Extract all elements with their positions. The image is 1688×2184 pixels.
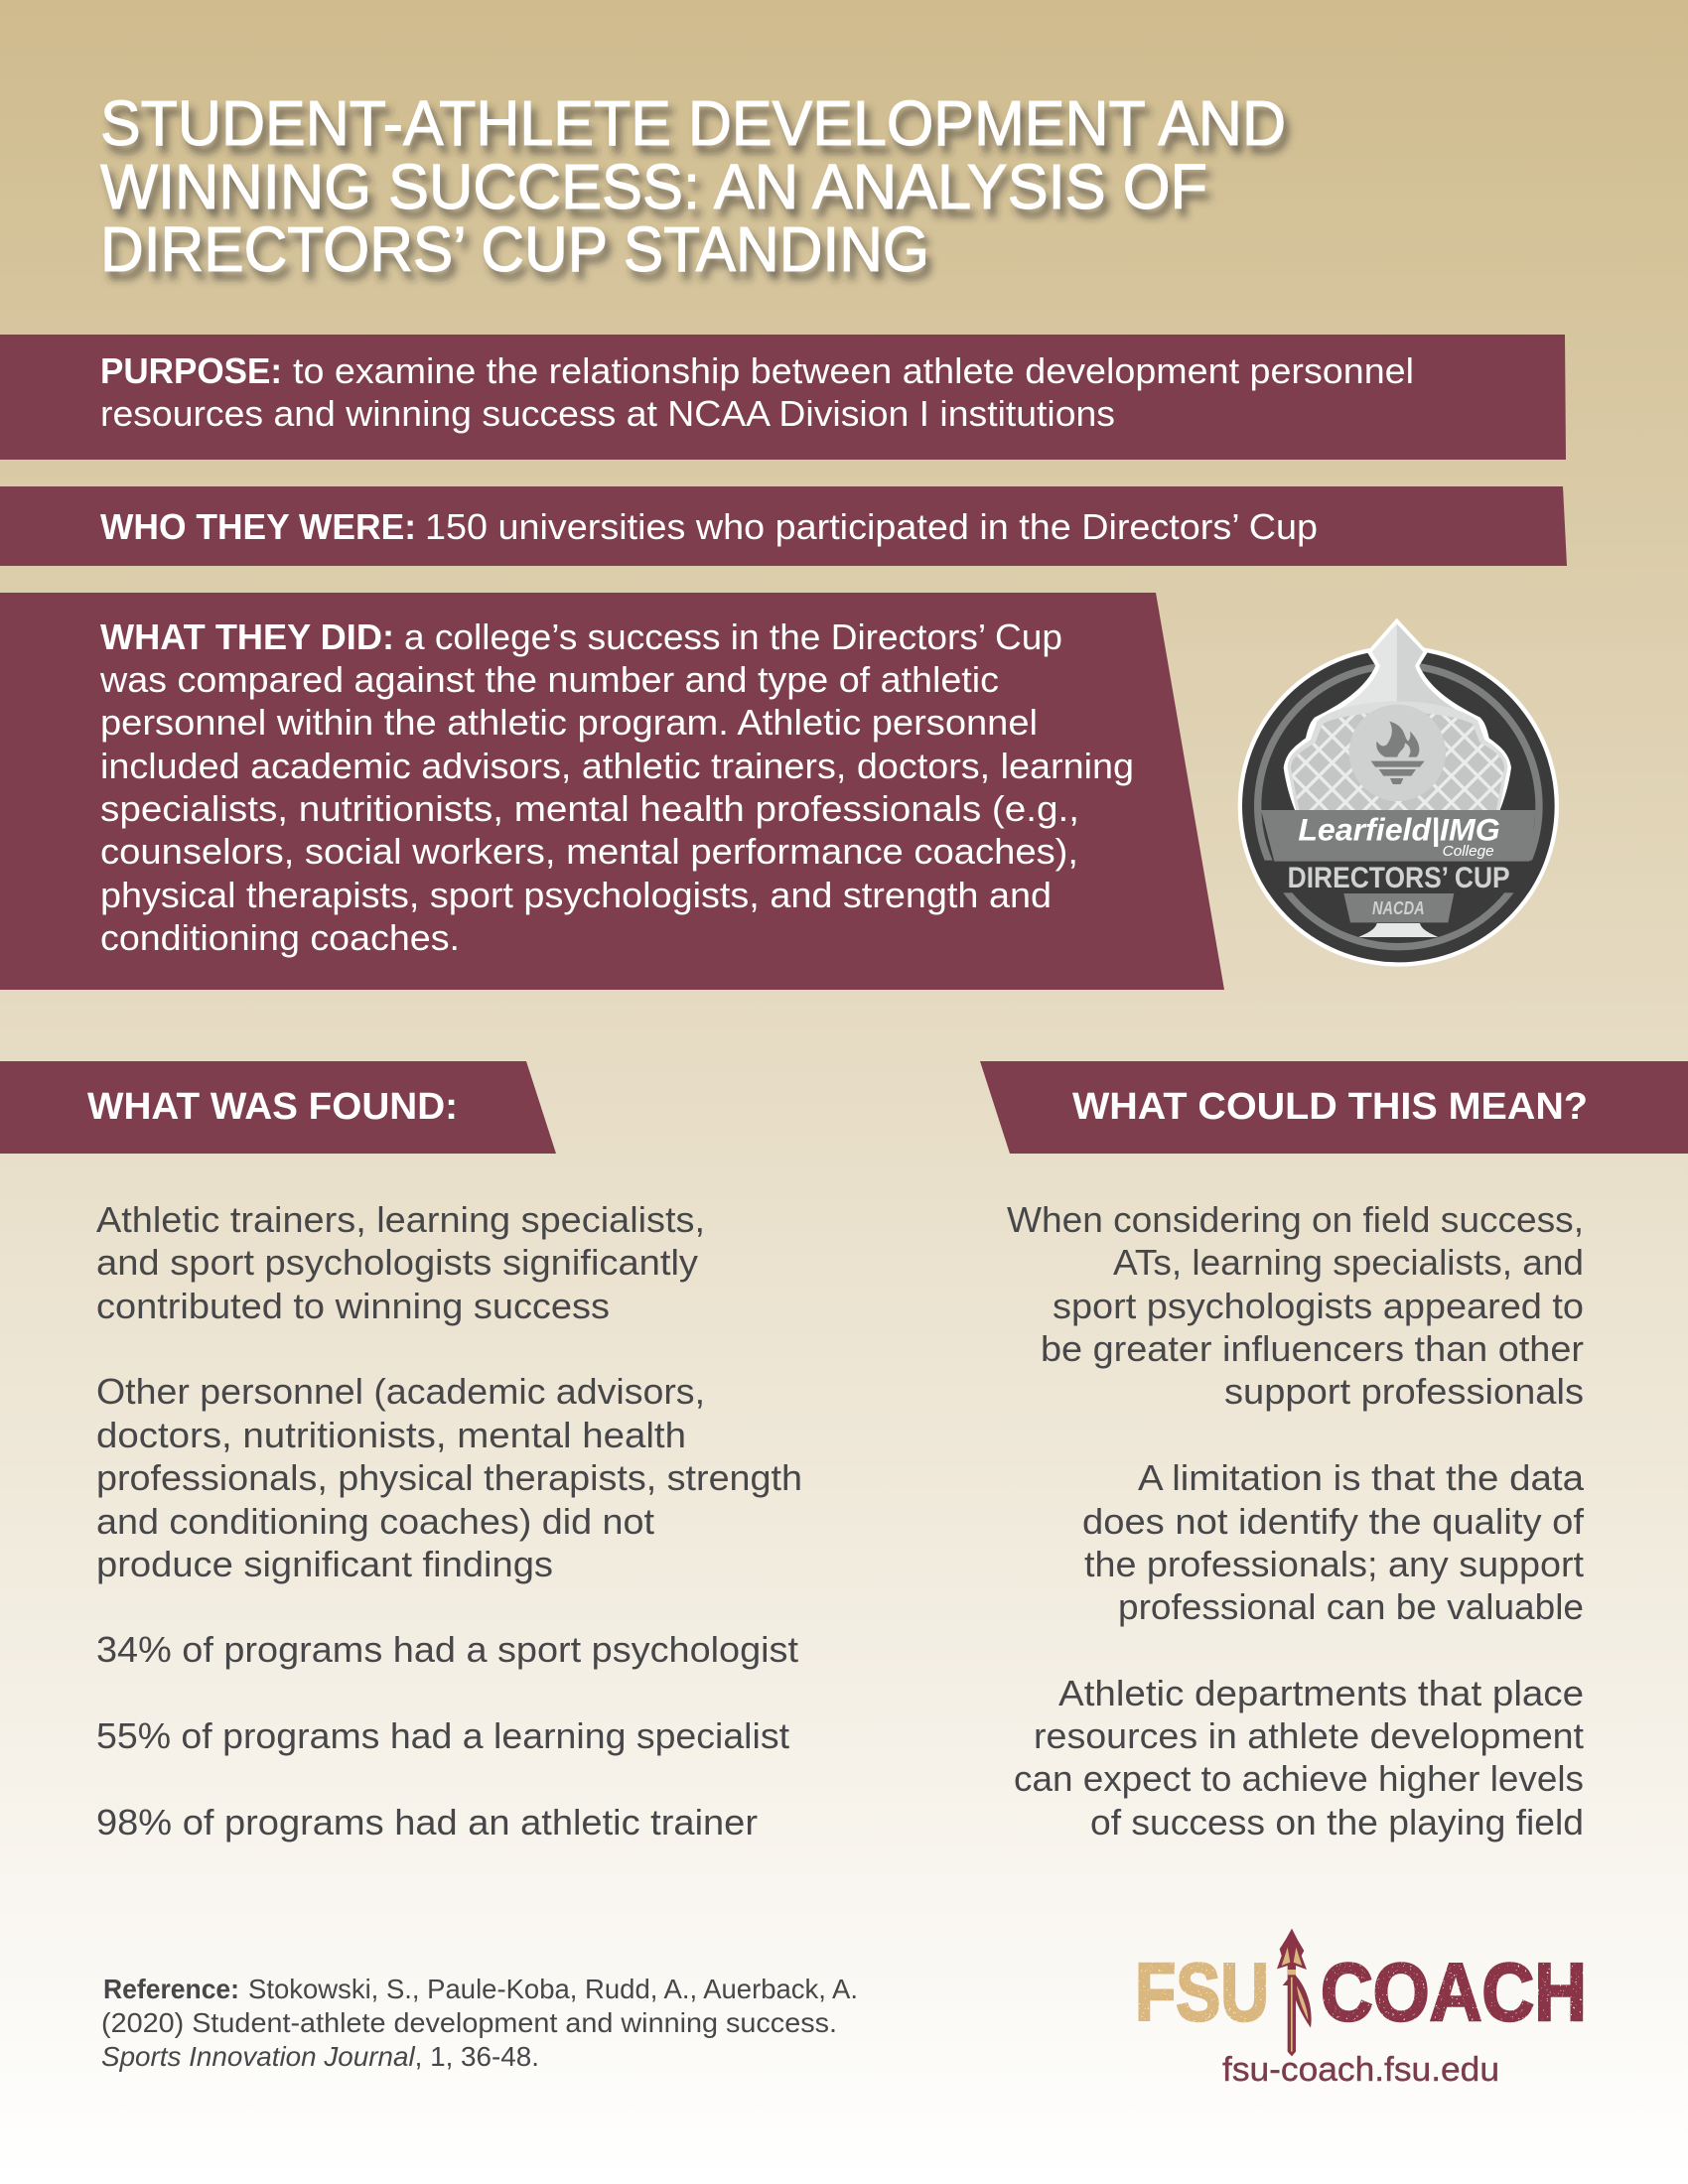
text block: implications: does not identify the quality of	[1082, 1501, 1585, 1542]
text block: findings	[96, 1199, 802, 1843]
panel: what they did: physical therapists, sport psychologists, and strength and	[100, 875, 1052, 915]
panel: purpose: to examine the relationship between athlete development personnel	[293, 350, 1414, 391]
logo wordmark COACH: COACH	[1321, 1946, 1587, 2038]
panel: what they did: a college’s success in the Directors’ Cup	[404, 616, 1062, 657]
panel: what they did: WHAT THEY DID:	[100, 616, 394, 657]
text block: findings: and conditioning coaches) did not	[96, 1501, 654, 1542]
text block: implications: resources in athlete development	[1034, 1715, 1584, 1756]
title: STUDENT-ATHLETE DEVELOPMENT AND	[100, 87, 1286, 159]
heading: what could this mean	[980, 1061, 1688, 1154]
text block: findings: 55% of programs had a learning specialist	[96, 1715, 789, 1756]
website url: fsu-coach.fsu.edu	[1222, 2051, 1499, 2089]
text block: implications: be greater influencers than other	[1041, 1328, 1584, 1369]
panel: what they did	[0, 593, 1224, 990]
heading: what could this mean: WHAT COULD THIS MEAN?	[1072, 1086, 1588, 1128]
panel: what they did: personnel within the athletic program. Athletic personnel	[100, 702, 1038, 743]
text block: implications: When considering on field success,	[1007, 1199, 1584, 1240]
panel: what they did: conditioning coaches.	[100, 917, 460, 958]
text block: findings: doctors, nutritionists, mental health	[96, 1415, 686, 1455]
icon: spear	[1277, 1929, 1312, 2056]
icon: Directors' Cup badge: Learfield|IMG	[1298, 813, 1500, 848]
icon: Directors' Cup badge: College	[1443, 844, 1494, 860]
icon: Directors' Cup badge	[1238, 618, 1559, 967]
title	[100, 87, 1286, 285]
reference citation: (2020) Student-athlete development and winning success.	[101, 2007, 837, 2038]
text block: implications: support professionals	[1224, 1371, 1584, 1412]
panel: what they did: included academic advisors, athletic trainers, doctors, learning	[100, 746, 1134, 786]
text block: implications: professional can be valuable	[1118, 1586, 1584, 1627]
panel: what they did: was compared against the number and type of athletic	[99, 659, 999, 700]
text block: findings: and sport psychologists significantly	[96, 1242, 698, 1283]
text block: implications	[1007, 1199, 1585, 1843]
text block: implications: sport psychologists appeared to	[1053, 1286, 1584, 1326]
panel: what they did: specialists, nutritionists, mental health professionals (e.g.,	[100, 788, 1079, 829]
panel: who they were	[0, 486, 1567, 566]
title: WINNING SUCCESS: AN ANALYSIS OF	[100, 151, 1207, 222]
text block: implications: ATs, learning specialists, and	[1113, 1242, 1584, 1283]
text block: findings: contributed to winning success	[96, 1286, 610, 1326]
reference citation: Reference:	[103, 1974, 239, 2004]
text block: implications: of success on the playing field	[1090, 1802, 1584, 1843]
logo: FSU Coach	[1135, 1929, 1587, 2056]
panel: what they did: counselors, social workers, mental performance coaches),	[100, 831, 1078, 872]
reference citation: Stokowski, S., Paule-Koba, Rudd, A., Auerback, A.	[248, 1974, 858, 2004]
heading: what was found	[0, 1061, 556, 1154]
text block: implications: Athletic departments that place	[1058, 1673, 1584, 1713]
text block: findings: produce significant findings	[96, 1544, 553, 1584]
text block: findings: professionals, physical therapists, strength	[96, 1457, 802, 1498]
text block: findings: Athletic trainers, learning specialists,	[96, 1199, 705, 1240]
text block: implications: the professionals; any support	[1084, 1544, 1584, 1584]
panel: who they were: WHO THEY WERE:	[100, 506, 416, 547]
reference citation: Sports Innovation Journal, 1, 36-48.	[101, 2041, 539, 2072]
icon: Directors' Cup badge: NACDA	[1372, 897, 1425, 918]
text block: implications: can expect to achieve higher levels	[1014, 1758, 1584, 1799]
heading: what was found: WHAT WAS FOUND:	[87, 1086, 458, 1128]
title: DIRECTORS’ CUP STANDING	[100, 213, 929, 285]
panel: purpose	[0, 335, 1566, 460]
reference citation	[101, 1974, 858, 2072]
panel: purpose: PURPOSE:	[100, 350, 282, 391]
panel: purpose: resources and winning success at NCAA Division I institutions	[100, 393, 1115, 434]
logo wordmark FSU: FSU	[1135, 1946, 1269, 2038]
panel: who they were: 150 universities who participated in the Directors’ Cup	[425, 506, 1318, 547]
text block: implications: A limitation is that the data	[1138, 1457, 1585, 1498]
text block: findings: 98% of programs had an athletic trainer	[96, 1802, 758, 1843]
text block: findings: 34% of programs had a sport psychologist	[96, 1629, 798, 1670]
icon: Directors' Cup badge: DIRECTORS’ CUP	[1288, 862, 1510, 894]
text block: findings: Other personnel (academic advisors,	[96, 1371, 705, 1412]
